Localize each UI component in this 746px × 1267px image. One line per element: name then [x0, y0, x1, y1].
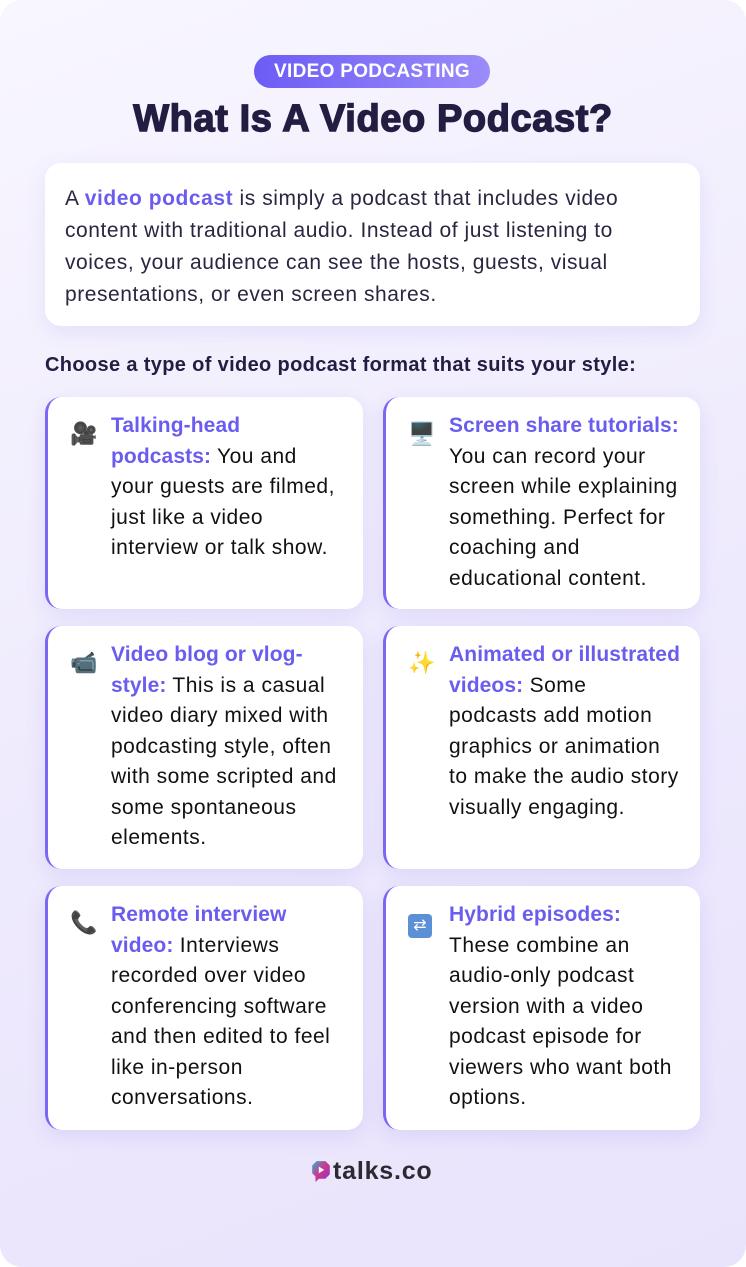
card: animated: podcasts add motion [449, 704, 652, 727]
icon: shuffle: ⇄ [413, 917, 427, 934]
pill label: VIDEO PODCASTING [274, 61, 470, 82]
card: hybrid: version with a video [449, 994, 643, 1018]
card: talking-head: interview or talk show. [111, 536, 328, 559]
card: remote interview: recorded over video [111, 964, 306, 987]
card: vlog: podcasting style, often [111, 734, 331, 758]
card: hybrid: options. [449, 1086, 527, 1109]
card: remote interview: video: Interviews [111, 934, 279, 956]
intro text box: voices, your audience can see the hosts, guests, visual [65, 251, 608, 274]
intro text box [45, 163, 700, 326]
card: screen share: coaching and [449, 536, 580, 559]
card: screen share: something. Perfect for [449, 506, 665, 528]
card: remote interview: conversations. [111, 1086, 253, 1109]
pill label [254, 55, 490, 88]
icon: monitor: 🖥️ [408, 421, 435, 446]
card: hybrid: podcast episode for [449, 1025, 642, 1048]
card: hybrid [383, 886, 700, 1130]
title: What Is A Video Podcast? [133, 98, 613, 140]
logo: talks.co [333, 1156, 433, 1184]
card: vlog [45, 626, 363, 869]
card: animated: to make the audio story [449, 765, 679, 788]
icon: phone: 📞 [70, 910, 97, 935]
card: talking-head: Talking-head [111, 414, 240, 437]
card: vlog: with some scripted and [111, 765, 337, 788]
icon: movie camera: 🎥 [70, 421, 97, 446]
card: talking-head: just like a video [111, 506, 263, 528]
icon: video camera: 📹 [70, 650, 97, 675]
card: remote interview: and then edited to feel [111, 1025, 330, 1048]
card: vlog: elements. [111, 826, 207, 849]
card: animated: visually engaging. [449, 796, 625, 818]
card: animated [383, 626, 700, 869]
intro text box: A video podcast is simply a podcast that includes video [65, 187, 618, 210]
card: vlog: some spontaneous [111, 796, 296, 818]
card: screen share: Screen share tutorials: [449, 414, 679, 437]
card: talking-head: podcasts: You and [111, 444, 297, 468]
subheading: Choose a type of video podcast format that suits your style: [45, 354, 636, 376]
icon: sparkles: ✨ [408, 650, 435, 675]
card: talking-head: your guests are filmed, [111, 475, 335, 498]
card: vlog: Video blog or vlog- [111, 643, 303, 666]
card: animated: videos: Some [449, 674, 586, 696]
card: screen share: educational content. [449, 566, 647, 590]
card: vlog: video diary mixed with [111, 704, 329, 727]
card: screen share: You can record your [449, 444, 646, 468]
card: screen share [383, 397, 700, 609]
card: animated: Animated or illustrated [449, 643, 680, 666]
intro text box: presentations, or even screen shares. [65, 283, 437, 306]
card: animated: graphics or animation [449, 734, 660, 758]
card: hybrid: These combine an [449, 934, 630, 956]
card: remote interview: like in-person [111, 1056, 243, 1078]
card: talking-head [45, 397, 363, 609]
card: remote interview [45, 886, 363, 1130]
card: vlog: style: This is a casual [111, 674, 325, 696]
card: remote interview: conferencing software [111, 994, 327, 1018]
card: screen share: screen while explaining [449, 475, 678, 498]
card: hybrid: audio-only podcast [449, 964, 634, 987]
card: remote interview: Remote interview [111, 903, 286, 926]
card: hybrid: Hybrid episodes: [449, 903, 621, 926]
card: hybrid: viewers who want both [449, 1056, 672, 1078]
intro text box: content with traditional audio. Instead of just listening to [65, 219, 613, 242]
